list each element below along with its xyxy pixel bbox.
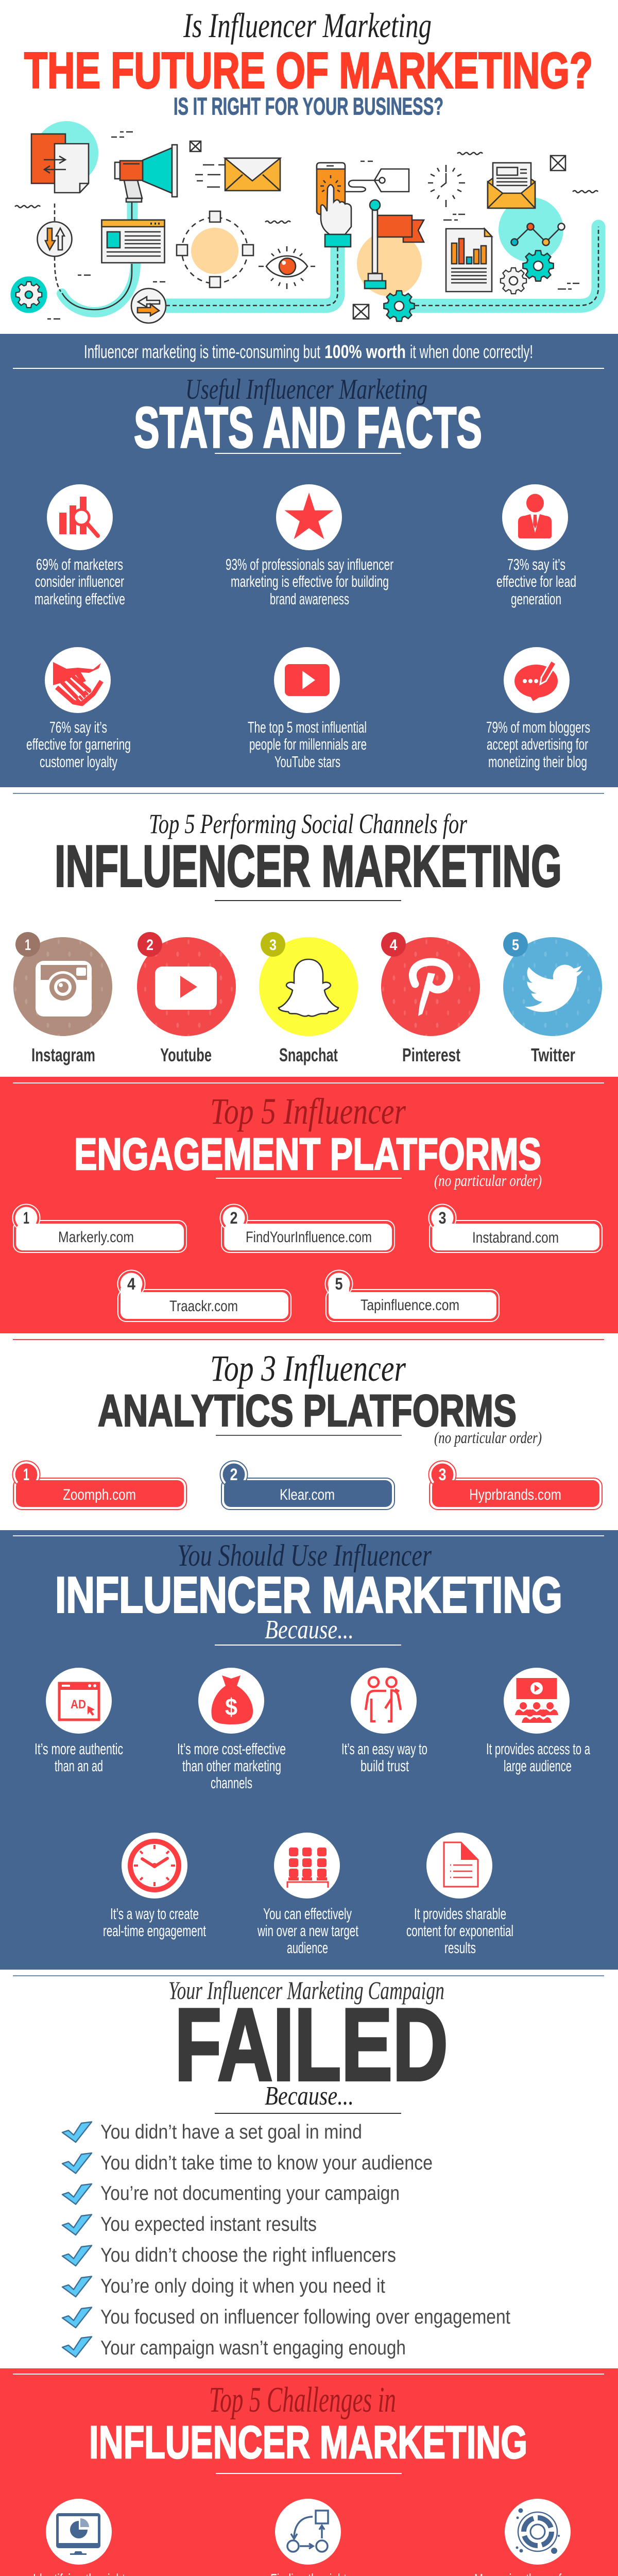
stat 2: marketing is effective for building [231,572,389,590]
checklist: You didn’t take time to know your audience [100,2152,433,2174]
pill: Hyprbrands [428,1461,602,1510]
icon: phone and hand [317,163,351,247]
pill: Traackr [117,1270,291,1321]
icon: document swap [31,121,98,193]
stat 1: marketing effective [35,590,125,608]
icon: browser window [102,220,165,263]
icon: megaphone [115,145,177,202]
pill: Klear: Klear.com [280,1486,335,1503]
panel: engagement platforms [0,1077,618,1333]
reason 2 [177,1668,286,1792]
pill: Hyprbrands: 3 [439,1465,446,1484]
checklist: You’re only doing it when you need it [100,2275,385,2297]
channel: Twitter: Twitter [531,1044,575,1065]
icon: open mail [488,163,563,262]
icon: clock dial [428,165,465,207]
script heading: Top 3 Influencer [210,1348,406,1389]
reason 3 [341,1668,427,1775]
reason 2: It’s more cost-effective [177,1740,286,1758]
channel: Pinterest: 4 [389,937,398,954]
reason 7: It provides sharable [414,1905,506,1923]
script heading: You Should Use Influencer [177,1538,432,1572]
note: (no particular order) [434,1428,542,1447]
reason 5: real-time engagement [103,1922,206,1940]
icon: tag [345,169,409,192]
stat 1 [35,484,125,608]
panel: challenges [0,2368,618,2576]
icon: gears [384,250,554,321]
reason 1: AD [71,1698,86,1711]
channel: Snapchat: 3 [269,937,277,954]
note: (no particular order) [434,1171,542,1190]
reason 5: It’s a way to create [110,1905,199,1923]
channel: Youtube [137,932,236,1065]
stat 5: YouTube stars [274,753,340,771]
reason 6: win over a new target [257,1922,358,1940]
tagline: it when done correctly! [410,341,533,362]
reason 2: channels [211,1774,252,1792]
pill: Klear [220,1461,394,1510]
channel: Instagram: 1 [25,937,31,954]
pill: Zoomph: 1 [23,1465,29,1484]
stat 4 [26,647,131,771]
challenge 3 [474,2499,602,2576]
channel: Youtube: 2 [146,937,153,954]
script heading: Is Influencer Marketing: Is Influencer Marketing [183,6,432,45]
reason 3: build trust [360,1757,409,1775]
panel: stats and facts [0,334,618,787]
pill: Klear: 2 [230,1465,238,1484]
reason 4: large audience [504,1757,572,1775]
section: analytics platforms [12,1348,602,1510]
reason 1: It’s more authentic [35,1740,123,1758]
stat 3: 73% say it’s [507,555,565,573]
stat 2 [226,484,393,608]
stat 2: brand awareness [270,590,349,608]
pill: Zoomph: Zoomph.com [63,1486,136,1503]
stat 3: effective for lead [496,572,576,590]
script heading: Top 5 Challenges in [209,2380,396,2420]
reason 2: than other marketing [182,1757,281,1775]
stat 6 [486,647,590,771]
icon: flag [357,200,424,296]
pill: Markerly [12,1205,186,1252]
stat 5: The top 5 most influential [248,718,367,736]
reason 6: audience [287,1939,328,1957]
checklist: You’re not documenting your campaign [100,2182,400,2205]
pill: Instabrand: 3 [439,1209,446,1227]
stat 4: customer loyalty [40,753,117,771]
checklist [62,2121,510,2359]
subtitle: IS IT RIGHT FOR YOUR BUSINESS? [174,93,443,120]
pill: Hyprbrands: Hyprbrands.com [469,1486,561,1503]
channel: Instagram [13,932,112,1065]
pill: Traackr: Traackr.com [169,1298,238,1315]
icon: line graph [511,224,564,245]
decorative dashes and crossed boxes [15,132,598,319]
channel: Youtube: Youtube [160,1044,212,1065]
stat 5 [248,647,367,771]
icon: envelope [195,158,280,191]
script: because: Because... [265,2081,354,2111]
channel: Twitter [503,932,602,1065]
stat 5: people for millennials are [249,735,367,753]
reason 7: content for exponential [406,1922,513,1940]
reason 1 [35,1668,123,1775]
checklist: You didn’t choose the right influencers [100,2244,396,2266]
script heading: Useful Influencer Marketing [185,374,427,405]
icon: circle arrows horizontal [131,289,166,323]
stat 2: 93% of professionals say influencer [226,555,393,573]
stat 1: 69% of marketers [36,555,123,573]
channel: Instagram: Instagram [31,1044,95,1065]
heading: FAILED [175,1988,448,2102]
tagline: Influencer marketing is time-consuming but [84,341,320,362]
pill: Traackr: 4 [127,1275,135,1293]
connector lines [55,202,598,312]
checklist: Your campaign wasn’t engaging enough [100,2337,406,2359]
stat 1: consider influencer [35,572,124,590]
checklist: You focused on influencer following over engagement [100,2306,510,2328]
stat 4: 76% say it’s [49,718,107,736]
tagline: 100% worth [324,341,406,362]
pill: Markerly: Markerly.com [58,1229,134,1246]
section: social channels [13,808,602,1065]
script heading: Top 5 Influencer [210,1091,406,1132]
script heading: Your Influencer Marketing Campaign [168,1976,444,2005]
pill: Tapinfluence [325,1270,499,1321]
pill: FindYourInfluence: FindYourInfluence.com [246,1229,372,1246]
reason 2: $ [225,1693,237,1720]
channel: Snapchat: Snapchat [279,1044,338,1065]
stat 3: generation [511,590,561,608]
channel: Pinterest [381,932,480,1065]
checklist: You expected instant results [100,2213,317,2235]
pill: Instabrand: Instabrand.com [472,1229,559,1246]
icon: teal gear [10,276,47,313]
pill: Zoomph [12,1461,186,1510]
pill: Tapinfluence: Tapinfluence.com [360,1297,459,1314]
channel: Pinterest: Pinterest [402,1044,460,1065]
pill: Markerly: 1 [23,1209,29,1227]
reason 1: than an ad [55,1757,103,1775]
pill: FindYourInfluence [220,1205,394,1252]
channel: Snapchat [259,932,358,1065]
script: because: Because... [265,1615,354,1645]
challenge 2 [245,2499,371,2576]
stat 4: effective for garnering [26,735,131,753]
challenge 1 [33,2499,125,2576]
reason 4 [486,1668,590,1775]
icon: chart document [446,229,492,292]
stat 3 [496,484,576,608]
section: failed [62,1976,510,2359]
icon: dashed ring [177,211,253,287]
checklist: You didn’t have a set goal in mind [100,2121,362,2143]
pill: Tapinfluence: 5 [335,1275,343,1293]
reason 6 [257,1833,358,1957]
panel: why use influencer marketing [0,1530,618,1970]
icon: eye [259,246,315,289]
script heading: Top 5 Performing Social Channels for [149,808,468,839]
reason 7 [406,1833,513,1957]
pill: Instabrand [428,1205,602,1252]
reason 7: results [444,1939,476,1957]
reason 6: You can effectively [263,1905,352,1923]
reason 5 [103,1833,206,1940]
reason 3: It’s an easy way to [341,1740,427,1758]
pill: FindYourInfluence: 2 [230,1209,238,1227]
hero illustration [10,121,598,323]
icon: circle arrows vertical [37,222,72,257]
channel: Twitter: 5 [512,937,519,954]
